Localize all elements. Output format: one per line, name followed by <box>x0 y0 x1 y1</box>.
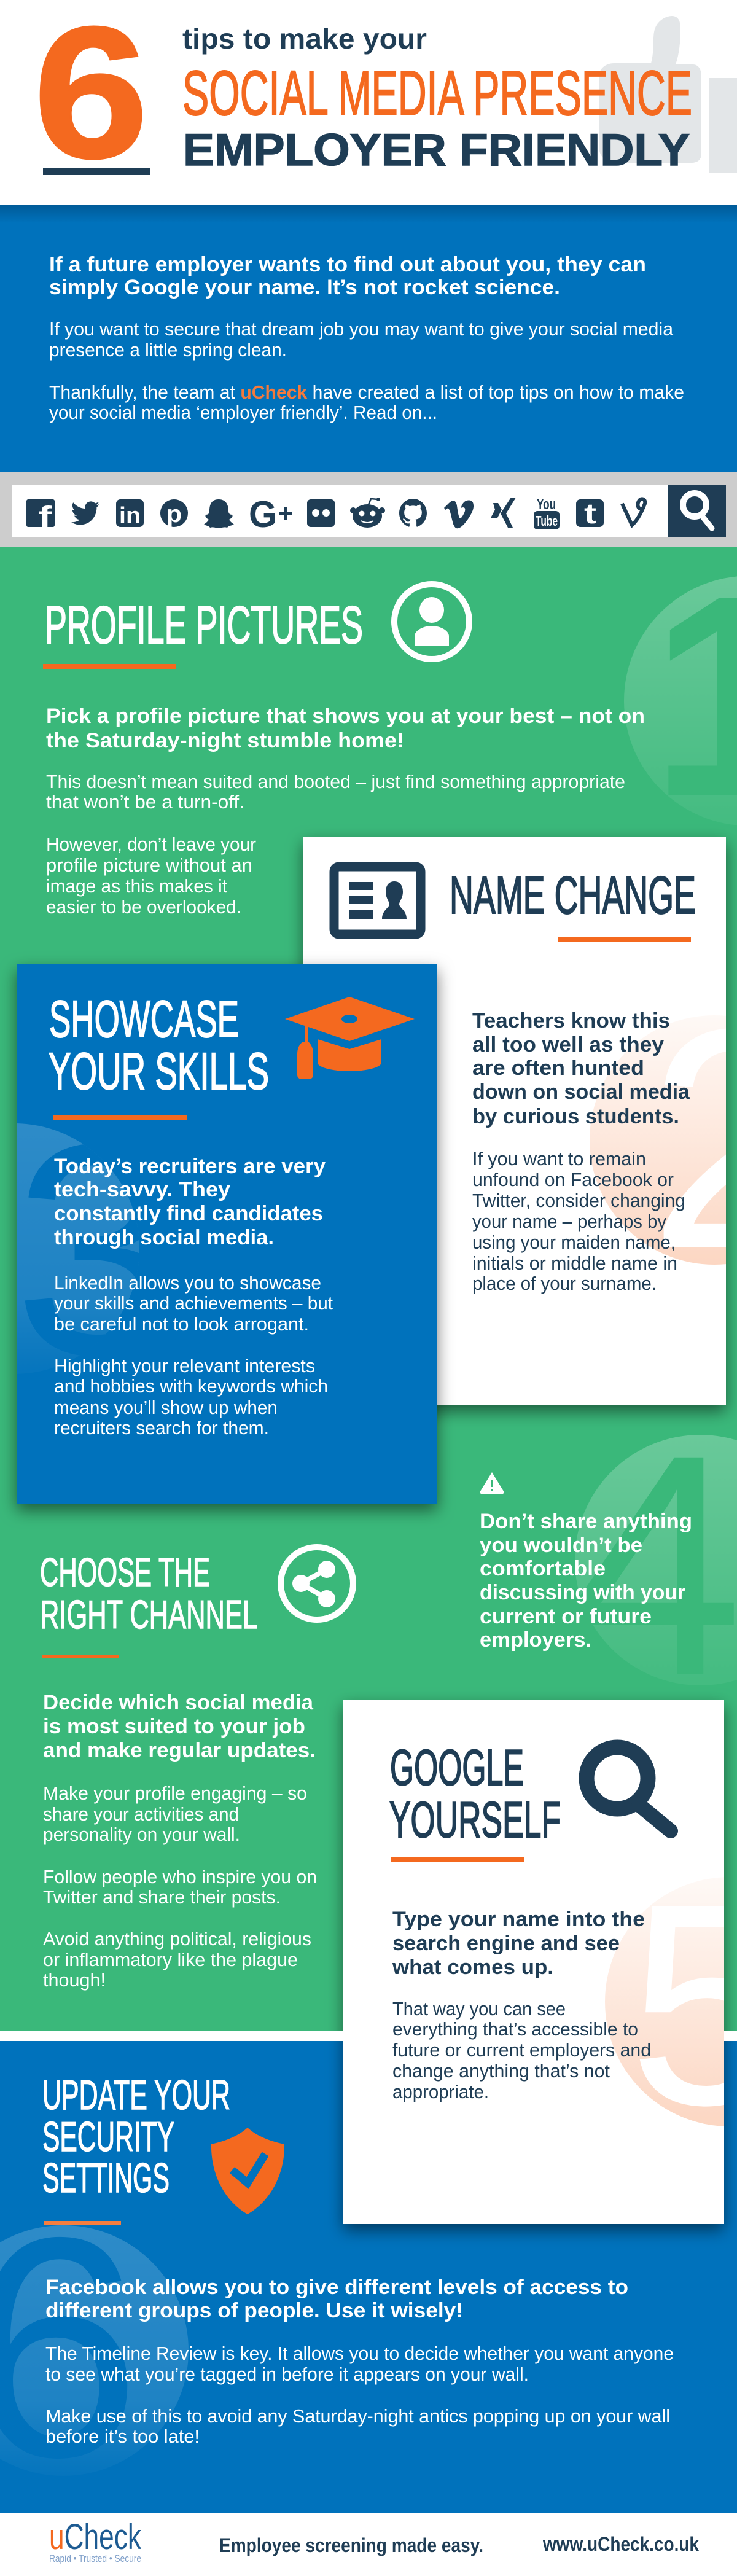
warning text: comfortable <box>480 1557 606 1580</box>
heading: profile pictures: PROFILE PICTURES <box>45 596 363 655</box>
heading rule <box>43 664 176 669</box>
google body text: future or current employers and <box>392 2039 651 2061</box>
showcase body text: means you’ll show up when <box>54 1397 278 1418</box>
icon: xing <box>491 498 516 528</box>
logo: uCheck <box>49 2517 142 2564</box>
heading: choose the right channel <box>40 1550 257 1637</box>
intro body text <box>49 318 684 423</box>
channel lead text: and make regular updates. <box>43 1739 316 1762</box>
warning text: you wouldn’t be <box>480 1534 642 1557</box>
google lead text <box>392 1908 645 1979</box>
intro body text: your social media ‘employer friendly’. Read on... <box>49 402 437 423</box>
showcase body text: recruiters search for them. <box>54 1417 269 1438</box>
google body text: appropriate. <box>392 2081 489 2102</box>
panel: update your security settings <box>0 2041 737 2523</box>
google lead text: what comes up. <box>392 1956 553 1979</box>
heading: showcase your skills <box>49 990 269 1100</box>
intro lead text: simply Google your name. It’s not rocket science. <box>49 276 560 299</box>
icon: warning triangle <box>480 1472 504 1494</box>
showcase body text: and hobbies with keywords which <box>54 1375 328 1397</box>
profile body text: This doesn’t mean suited and booted – just find something appropriate <box>46 771 625 792</box>
icon: profile person <box>394 584 469 659</box>
icon: github <box>399 499 427 527</box>
name change lead text: by curious students. <box>472 1105 679 1128</box>
icon: pinterest: p <box>166 501 182 528</box>
title: EMPLOYER FRIENDLY <box>183 125 690 175</box>
google body text: change anything that’s not <box>392 2060 610 2082</box>
name change body text: Twitter, consider changing <box>472 1190 685 1211</box>
intro body text: If you want to secure that dream job you may want to give your social media <box>49 318 674 340</box>
name change lead text: down on social media <box>472 1080 690 1104</box>
security body text <box>45 2343 674 2447</box>
google body text: That way you can see <box>392 1998 566 2020</box>
showcase lead text: through social media. <box>54 1226 274 1249</box>
heading: google yourself: GOOGLE <box>390 1739 524 1796</box>
channel body text: Avoid anything political, religious <box>43 1928 311 1950</box>
showcase lead text <box>54 1155 326 1249</box>
security body text: The Timeline Review is key. It allows you to decide whether you want anyone <box>45 2343 674 2364</box>
name change body text: unfound on Facebook or <box>472 1169 674 1190</box>
heading rule <box>391 1857 524 1862</box>
watermark number 1 <box>624 576 737 825</box>
security body text: before it’s too late! <box>45 2426 200 2447</box>
icon: magnifying glass <box>587 1747 671 1831</box>
watermark number 2 <box>590 1015 726 1265</box>
name change body text: If you want to remain <box>472 1148 646 1169</box>
icon: google plus: G <box>249 494 277 535</box>
heading rule <box>558 937 691 942</box>
security body text: Make use of this to avoid any Saturday-night antics popping up on your wall <box>45 2405 670 2427</box>
security lead text: Facebook allows you to give different levels of access to <box>45 2276 628 2299</box>
showcase body text: be careful not to look arrogant. <box>54 1313 309 1335</box>
profile body text: image as this makes it <box>46 875 227 897</box>
showcase body text <box>54 1272 333 1438</box>
intro body text: presence a little spring clean. <box>49 339 287 361</box>
heading rule <box>44 2221 121 2225</box>
watermark number 6 <box>0 2225 189 2465</box>
heading: update your security settings: SECURITY <box>42 2113 174 2160</box>
icon: vimeo <box>444 501 474 528</box>
panel: google yourself <box>333 1696 735 2241</box>
icon: vine <box>622 499 645 525</box>
profile body text: profile picture without an <box>46 854 252 876</box>
heading: update your security settings <box>42 2072 230 2201</box>
intro body text: Thankfully, the team at uCheck have created a list of top tips on how to make <box>49 381 684 403</box>
intro lead text: If a future employer wants to find out about you, they can <box>49 253 646 276</box>
showcase body text: LinkedIn allows you to showcase <box>54 1272 321 1294</box>
heading: google yourself <box>389 1739 561 1848</box>
channel lead text: Decide which social media <box>43 1691 314 1714</box>
channel body text: personality on your wall. <box>43 1824 240 1845</box>
profile body text: However, don’t leave your <box>46 833 256 855</box>
watermark number 4 <box>575 1435 737 1685</box>
logo: uCheck: Rapid • Trusted • Secure <box>49 2553 141 2564</box>
showcase body text: your skills and achievements – but <box>54 1292 333 1314</box>
heading rule <box>53 1115 187 1120</box>
panel: showcase your skills <box>0 964 437 1504</box>
icon: snapchat <box>204 499 234 528</box>
warning text: Don’t share anything <box>480 1510 692 1533</box>
name change body text: initials or middle name in <box>472 1252 677 1274</box>
heading: choose the right channel: CHOOSE THE <box>40 1550 210 1594</box>
panel: green background <box>0 547 737 2031</box>
footer tagline: Employee screening made easy. <box>219 2534 483 2556</box>
heading: update your security settings: UPDATE YOUR <box>42 2072 230 2118</box>
panel: do not share warning <box>480 1435 737 1685</box>
watermark number 3: 3 <box>14 1081 181 1418</box>
showcase lead text: tech-savvy. They <box>54 1178 230 1201</box>
icon: youtube <box>534 496 560 529</box>
icon: youtube: You <box>537 496 556 513</box>
profile lead text <box>46 704 645 752</box>
channel lead text: is most suited to your job <box>43 1715 305 1738</box>
channel body text: share your activities and <box>43 1803 239 1825</box>
title <box>182 23 692 175</box>
title: tips to make your <box>182 23 427 55</box>
security lead text: different groups of people. Use it wisely! <box>45 2299 463 2322</box>
panel: social media bar <box>0 472 737 547</box>
warning text <box>480 1510 692 1652</box>
icon: linkedin: in <box>119 502 141 528</box>
intro lead text <box>49 253 646 299</box>
name change body text: using your maiden name, <box>472 1231 676 1253</box>
icon: thumbs up watermark <box>599 16 737 173</box>
channel body text: Follow people who inspire you on <box>43 1866 317 1887</box>
panel: choose the right channel <box>40 1547 353 1991</box>
icon: share <box>281 1547 353 1620</box>
name change body text: your name – perhaps by <box>472 1211 666 1232</box>
icon: facebook <box>26 499 55 534</box>
icon: google plus <box>249 494 292 535</box>
name change lead text: Teachers know this <box>472 1009 670 1032</box>
channel body text <box>43 1782 317 1991</box>
heading: update your security settings: SETTINGS <box>42 2155 170 2201</box>
footer <box>0 2513 737 2576</box>
warning text: discussing with your <box>480 1581 685 1604</box>
name change lead text <box>472 1009 690 1128</box>
warning text: current or future <box>480 1605 652 1628</box>
channel body text: Twitter and share their posts. <box>43 1886 281 1908</box>
icon: twitter <box>71 501 99 525</box>
header panel <box>0 0 737 205</box>
channel body text: though! <box>43 1969 106 1991</box>
google body text <box>392 1998 651 2102</box>
name change lead text: all too well as they <box>472 1033 664 1056</box>
icon: graduation cap <box>285 997 415 1079</box>
warning text: employers. <box>480 1628 591 1652</box>
heading: showcase your skills: SHOWCASE <box>49 990 239 1048</box>
showcase lead text: Today’s recruiters are very <box>54 1155 326 1178</box>
security lead text <box>45 2276 628 2322</box>
icon: reddit <box>350 498 385 528</box>
name change body text <box>472 1148 685 1294</box>
panel: name change <box>303 837 737 1405</box>
icon: pinterest <box>160 499 188 528</box>
heading rule <box>42 1655 119 1658</box>
profile body text <box>46 771 625 918</box>
icon: tumblr <box>576 498 604 529</box>
panel: profile pictures <box>43 536 737 918</box>
showcase lead text: constantly find candidates <box>54 1202 323 1225</box>
watermark number 3 <box>17 1123 139 1364</box>
profile lead text: Pick a profile picture that shows you at your best – not on <box>46 704 645 728</box>
channel lead text <box>43 1691 316 1762</box>
icon: facebook: f <box>38 501 52 534</box>
google body text: everything that’s accessible to <box>392 2018 638 2040</box>
profile body text: easier to be overlooked. <box>46 896 241 918</box>
heading: google yourself: YOURSELF <box>389 1791 561 1848</box>
channel body text: or inflammatory like the plague <box>43 1949 298 1970</box>
icon: id card <box>334 867 421 934</box>
profile lead text: the Saturday-night stumble home! <box>46 729 404 752</box>
icon: search box <box>668 485 726 537</box>
heading: choose the right channel: RIGHT CHANNEL <box>40 1592 257 1637</box>
watermark number 5 <box>605 1877 724 2126</box>
profile body text: that won’t be a turn-off. <box>46 791 244 813</box>
logo: uCheck: uCheck <box>49 2517 142 2557</box>
icon: linkedin <box>116 499 144 528</box>
icon: flickr <box>307 499 335 527</box>
panel: intro <box>0 205 737 472</box>
name change body text: place of your surname. <box>472 1273 657 1294</box>
icon: youtube: Tube <box>536 513 558 529</box>
icon: tumblr: t <box>584 498 596 529</box>
google lead text: search engine and see <box>392 1932 620 1955</box>
channel body text: Make your profile engaging – so <box>43 1782 307 1804</box>
icon: shield <box>211 2128 284 2214</box>
heading: showcase your skills: YOUR SKILLS <box>49 1042 269 1100</box>
security body text: to see what you’re tagged in before it appears on your wall. <box>45 2363 529 2385</box>
showcase body text: Highlight your relevant interests <box>54 1355 315 1376</box>
footer url: www.uCheck.co.uk <box>542 2533 699 2555</box>
name change lead text: are often hunted <box>472 1056 644 1080</box>
google lead text: Type your name into the <box>392 1908 645 1931</box>
